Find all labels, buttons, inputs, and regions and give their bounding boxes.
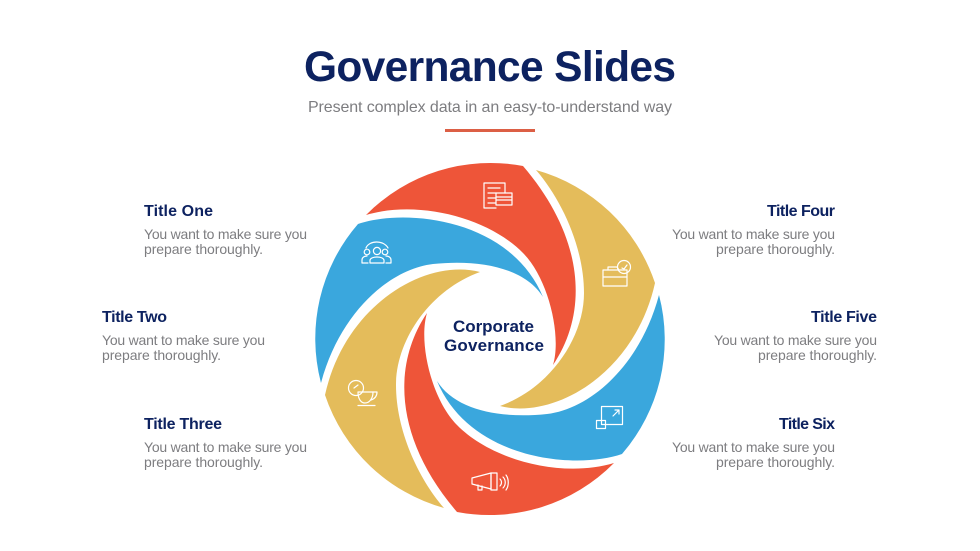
title: Governance Slides bbox=[304, 44, 676, 91]
text block: title two: Title Two bbox=[102, 309, 167, 326]
text block: title five: prepare thoroughly. bbox=[758, 347, 877, 363]
text block: title four bbox=[672, 203, 835, 257]
text block: title four: Title Four bbox=[767, 203, 835, 220]
text block: title six bbox=[672, 416, 835, 470]
icon: people group bbox=[362, 242, 391, 263]
center label: Corporate bbox=[453, 317, 534, 336]
subtitle: Present complex data in an easy-to-understand way bbox=[308, 99, 672, 116]
text block: title three bbox=[144, 416, 307, 470]
icon: documents and card bbox=[484, 183, 512, 208]
text block: title six: You want to make sure you bbox=[672, 439, 835, 455]
spiral diagram bbox=[315, 163, 665, 515]
text block: title two: You want to make sure you bbox=[102, 332, 265, 348]
center label: Governance bbox=[444, 336, 544, 355]
text block: title one bbox=[144, 203, 307, 257]
segment: yellow left bbox=[325, 270, 480, 508]
icon: coffee cup and clock bbox=[348, 380, 377, 406]
text block: title four: You want to make sure you bbox=[672, 226, 835, 242]
text block: title six: Title Six bbox=[779, 416, 835, 433]
text block: title three: You want to make sure you bbox=[144, 439, 307, 455]
segment: blue left bbox=[315, 218, 543, 383]
center label bbox=[444, 317, 544, 355]
text block: title one: prepare thoroughly. bbox=[144, 241, 263, 257]
segment: red top bbox=[366, 163, 576, 365]
segment: yellow right bbox=[500, 170, 655, 408]
segment: blue right bbox=[437, 295, 665, 460]
icon: resize window bbox=[596, 406, 622, 428]
text block: title five: You want to make sure you bbox=[714, 332, 877, 348]
title underline accent bbox=[445, 129, 535, 132]
text block: title three: prepare thoroughly. bbox=[144, 454, 263, 470]
text block: title two bbox=[102, 309, 265, 363]
icon: megaphone bbox=[472, 473, 508, 490]
text block: title six: prepare thoroughly. bbox=[716, 454, 835, 470]
text block: title five bbox=[714, 309, 877, 363]
text block: title three: Title Three bbox=[144, 416, 222, 433]
text block: title five: Title Five bbox=[811, 309, 877, 326]
icon: briefcase and clock bbox=[603, 260, 630, 286]
text block: title one: You want to make sure you bbox=[144, 226, 307, 242]
text block: title one: Title One bbox=[144, 203, 213, 220]
segment: red bottom bbox=[404, 313, 614, 515]
text block: title two: prepare thoroughly. bbox=[102, 347, 221, 363]
text block: title four: prepare thoroughly. bbox=[716, 241, 835, 257]
